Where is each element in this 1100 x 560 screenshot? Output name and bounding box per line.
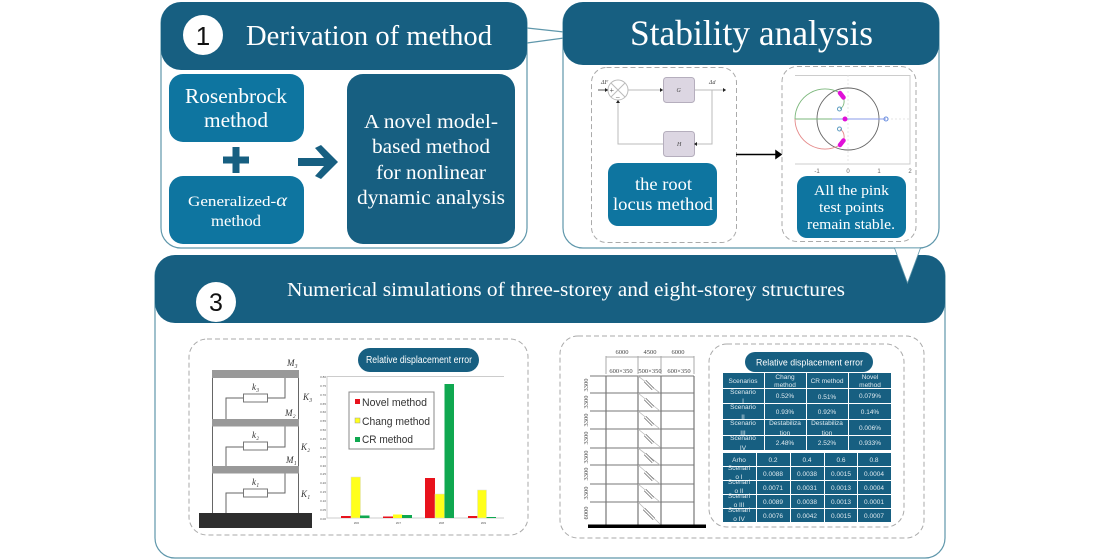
box: Rosenbrock method: Rosenbrock xyxy=(185,84,287,108)
table: arho values: 0.0004 xyxy=(864,471,884,478)
box: Generalized-alpha method: method xyxy=(211,213,261,230)
box: Generalized-alpha method xyxy=(169,176,304,244)
table: arho values: 0.0004 xyxy=(864,485,884,492)
diagram: three-storey frame: M₁ xyxy=(285,455,297,465)
table: scenario errors: 2.52% xyxy=(818,440,836,447)
chart: root locus: 0 xyxy=(846,169,850,175)
table: arho values: 0.0013 xyxy=(831,499,851,506)
table: scenario errors: CR method xyxy=(811,378,844,385)
table: arho values: 0.0071 xyxy=(763,485,783,492)
legend xyxy=(349,392,434,449)
table: scenario errors: Scenario xyxy=(730,404,756,411)
diagram: three-storey frame: K₁ xyxy=(300,489,310,499)
diagram: feedback loop xyxy=(598,78,726,156)
frame dimensions: 600×350 xyxy=(609,368,633,375)
table: arho values: Scenari xyxy=(728,465,750,472)
table: arho values xyxy=(723,453,891,523)
table: scenario errors: Scenario xyxy=(730,420,756,427)
diagram: three-storey frame: k₁ xyxy=(252,477,259,487)
table: arho values: 0.0038 xyxy=(797,499,817,506)
frame dimensions: 6000 xyxy=(616,349,628,356)
axis tick labels: 0.60 xyxy=(320,410,326,414)
axis tick labels: 0.75 xyxy=(320,384,326,388)
frame dimensions: 3300 xyxy=(583,396,590,408)
legend: Novel method xyxy=(362,397,427,409)
arrow: to novel method xyxy=(298,145,338,179)
chart title pill xyxy=(358,348,479,372)
axis tick labels: 0.45 xyxy=(320,437,326,441)
arrow: to root locus plot xyxy=(736,151,781,158)
axis tick labels: 0.80 xyxy=(320,375,326,379)
axis tick labels: 0.15 xyxy=(320,490,326,494)
table: arho values: o I xyxy=(735,474,743,481)
box: the root locus method xyxy=(608,163,717,226)
box: pink test points remain stable xyxy=(797,176,906,238)
axis tick labels: 0.35 xyxy=(320,455,326,459)
axis tick labels: Z06 xyxy=(354,521,359,525)
panel: stability analysis xyxy=(563,2,939,248)
diagram: three-storey frame: K₂ xyxy=(300,442,310,452)
table: scenario errors: III xyxy=(740,430,746,437)
frame dimensions: 3300 xyxy=(583,414,590,426)
box: the root locus method: the root xyxy=(635,174,692,194)
axis tick labels: 0.10 xyxy=(320,499,326,503)
diagram: three-storey frame xyxy=(199,358,312,528)
box: pink test points remain stable: remain stable. xyxy=(807,217,895,233)
table title pill: Relative displacement error xyxy=(756,358,863,368)
table: scenario errors: 0.933% xyxy=(859,440,881,447)
diagram: three-storey frame: K₃ xyxy=(302,392,312,402)
table: scenario errors: 0.006% xyxy=(859,425,881,432)
table: scenario errors: 2.48% xyxy=(776,440,794,447)
box: the root locus method: locus method xyxy=(613,194,713,214)
axis tick labels: 0.20 xyxy=(320,481,326,485)
panel: eight-storey structure and tables xyxy=(560,336,924,538)
axis tick labels xyxy=(320,375,486,525)
table: arho values: 0.4 xyxy=(802,457,812,464)
table: arho values: 0.0089 xyxy=(763,499,783,506)
heading bar: numerical simulations: 3 xyxy=(209,289,223,317)
frame dimensions: 6000 xyxy=(583,506,590,520)
table: scenario errors: Scenario xyxy=(730,389,756,396)
chart: root locus xyxy=(795,75,912,175)
table: scenario errors: 0.52% xyxy=(776,393,794,400)
table: scenario errors: method xyxy=(859,382,881,389)
panel: derivation of method xyxy=(161,2,527,248)
diagram: three-storey frame: M₂ xyxy=(284,408,296,418)
table: arho values: 0.0015 xyxy=(831,513,851,520)
table: scenario errors: II xyxy=(741,414,745,421)
frame dimensions: 6000 xyxy=(672,349,684,356)
panel: numerical simulations xyxy=(155,255,945,558)
frame dimensions: 600×350 xyxy=(667,368,691,375)
table: arho values: Scenari xyxy=(728,507,750,514)
axis tick labels: 0.00 xyxy=(320,517,326,521)
table: arho values: o II xyxy=(734,488,744,495)
table: arho values: Scenari xyxy=(728,493,750,500)
frame dimensions: 3300 xyxy=(583,450,590,464)
axis tick labels: Z09 xyxy=(481,521,486,525)
table: scenario errors: Scenarios xyxy=(729,378,758,385)
table: scenario errors: tion xyxy=(780,430,791,437)
box: Rosenbrock method: method xyxy=(204,108,268,132)
chart: root locus: 2 xyxy=(908,169,912,175)
box: novel model-based method: based method xyxy=(372,136,490,158)
table: scenario errors: Destabiliza xyxy=(811,420,843,427)
legend: CR method xyxy=(362,434,413,446)
table: scenario errors: method xyxy=(774,382,796,389)
table: arho values: o IV xyxy=(733,516,745,523)
frame dimensions: 3300 xyxy=(583,378,590,392)
axis tick labels: 0.55 xyxy=(320,419,326,423)
diagram labels: − xyxy=(615,93,620,102)
frame dimensions: 4500 xyxy=(644,349,656,356)
frame dimensions: 3300 xyxy=(583,486,590,500)
table: scenario errors: IV xyxy=(740,445,747,452)
heading bar: stability analysis: Stability analysis xyxy=(630,13,873,53)
diagram labels: ΔF xyxy=(600,80,609,86)
table: arho values: o III xyxy=(734,502,745,509)
box: novel model-based method: A novel model- xyxy=(364,111,498,133)
frame dimensions: 3300 xyxy=(583,468,590,480)
axis tick labels: 0.50 xyxy=(320,428,326,432)
box: Rosenbrock method xyxy=(169,74,304,142)
box: pink test points remain stable: test points xyxy=(819,200,884,216)
diagram: eight-storey frame xyxy=(583,349,706,528)
table: arho values: Arho xyxy=(732,457,746,464)
table: arho values: 0.0015 xyxy=(831,471,851,478)
chart: root locus: 1 xyxy=(877,169,881,175)
table: scenario errors: 0.079% xyxy=(859,393,881,400)
table: scenario errors xyxy=(723,373,891,452)
chart: root locus: -1 xyxy=(814,169,820,175)
axis tick labels: Z08 xyxy=(439,521,444,525)
diagram: three-storey frame: k₃ xyxy=(252,382,259,392)
axis tick labels: 0.40 xyxy=(320,446,326,450)
table: arho values: 0.0042 xyxy=(797,513,817,520)
table: scenario errors: 0.51% xyxy=(818,394,836,401)
panel: three-storey structure and chart xyxy=(189,339,528,535)
table: arho values: 0.0007 xyxy=(864,513,884,520)
box: novel model-based method: for nonlinear xyxy=(376,162,486,184)
table title pill xyxy=(745,352,873,372)
box: pink test points remain stable: All the pink xyxy=(814,183,890,199)
heading bar: stability analysis xyxy=(563,2,939,65)
table: arho values: 0.2 xyxy=(768,457,778,464)
heading bar: derivation of method xyxy=(161,2,527,70)
table: arho values: 0.8 xyxy=(869,457,879,464)
axis tick labels: 0.30 xyxy=(320,464,326,468)
diagram labels: Δd xyxy=(708,80,717,86)
table: arho values: 0.0038 xyxy=(797,471,817,478)
box: Generalized-alpha method: Generalized- α xyxy=(188,190,288,210)
box: novel model-based method xyxy=(347,74,515,244)
table: arho values: 0.0001 xyxy=(864,499,884,506)
table: scenario errors: tion xyxy=(822,430,833,437)
table: arho values: 0.0031 xyxy=(797,485,817,492)
heading bar: numerical simulations: Numerical simulations of three-storey and eight-storey structures xyxy=(287,279,845,301)
table: scenario errors: 0.14% xyxy=(861,409,879,416)
axis tick labels: Z07 xyxy=(396,521,401,525)
heading bar: derivation of method: Derivation of method xyxy=(246,21,492,52)
diagram labels: H xyxy=(676,142,682,148)
bar chart: relative displacement error xyxy=(320,375,504,525)
diagram: three-storey frame: M₃ xyxy=(286,358,298,368)
axis tick labels: 0.25 xyxy=(320,472,326,476)
icon: plus xyxy=(223,147,249,173)
arrow: callout connector between panels xyxy=(527,28,564,43)
diagram labels: + xyxy=(609,86,614,95)
table: arho values: 0.0076 xyxy=(763,513,783,520)
table: arho values: 0.6 xyxy=(836,457,846,464)
arrow: callout pointer from stability analysis to simulations xyxy=(894,248,920,283)
table: scenario errors: Novel xyxy=(862,374,879,381)
panel: root locus plot xyxy=(782,66,916,242)
table: arho values: Scenari xyxy=(728,479,750,486)
axis tick labels: 0.65 xyxy=(320,402,326,406)
heading bar: derivation of method: 1 xyxy=(196,21,210,51)
legend: Chang method xyxy=(362,416,430,428)
frame dimensions: 500×350 xyxy=(638,368,662,375)
panel: tables xyxy=(709,344,904,527)
box: novel model-based method: dynamic analysis xyxy=(357,187,505,209)
table: scenario errors: 0.92% xyxy=(818,409,836,416)
frame dimensions: 3300 xyxy=(583,432,590,444)
diagram labels: G xyxy=(676,88,682,94)
table: scenario errors: 0.93% xyxy=(776,409,794,416)
table: arho values: 0.0088 xyxy=(763,471,783,478)
table: scenario errors: Chang xyxy=(775,374,795,381)
table: scenario errors: Destabiliza xyxy=(769,420,801,427)
frame dimensions xyxy=(583,349,691,520)
heading bar: numerical simulations xyxy=(155,255,945,323)
table: arho values: 0.0013 xyxy=(831,485,851,492)
panel: block diagram xyxy=(592,68,736,242)
axis tick labels: 0.70 xyxy=(320,393,326,397)
diagram labels xyxy=(600,80,726,148)
diagram: three-storey frame: k₂ xyxy=(252,430,259,440)
table: scenario errors: I xyxy=(742,398,744,405)
table: scenario errors: Scenario xyxy=(730,435,756,442)
axis tick labels: 0.05 xyxy=(320,508,326,512)
chart title pill: Relative displacement error xyxy=(366,355,473,366)
